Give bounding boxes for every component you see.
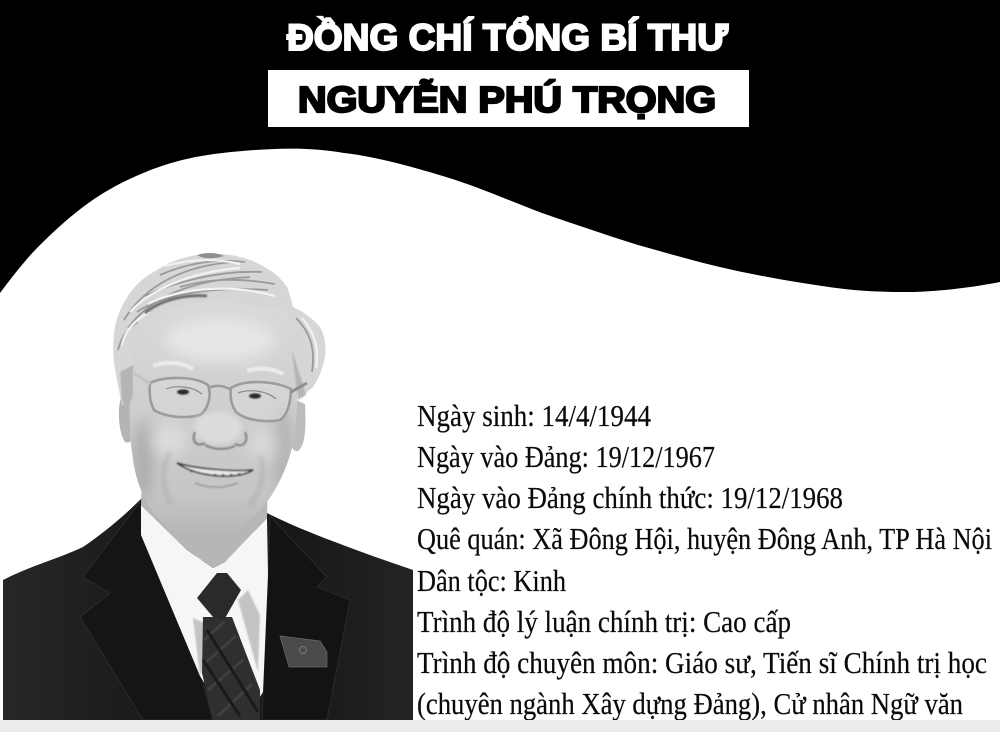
jacket bbox=[3, 497, 413, 720]
title: line 1: ĐỒNG CHÍ TỔNG BÍ THƯ bbox=[287, 15, 728, 58]
hair bbox=[113, 253, 325, 412]
eyelid lines bbox=[166, 387, 276, 399]
nose bbox=[194, 412, 246, 449]
eyebrows bbox=[153, 363, 283, 374]
hair sideburn shade bbox=[120, 350, 306, 412]
official party entry date: Ngày vào Đảng chính thức: 19/12/1968 bbox=[417, 480, 843, 515]
right ear bbox=[291, 400, 305, 451]
name text: NGUYỄN PHÚ TRỌNG bbox=[298, 78, 716, 120]
lapel pin bbox=[280, 636, 327, 667]
face bbox=[130, 301, 297, 541]
title: name plate bbox=[268, 70, 749, 127]
left ear bbox=[119, 395, 136, 442]
black wave header bbox=[0, 0, 1000, 293]
collar shadow bbox=[193, 590, 260, 676]
bottom grey band bbox=[0, 720, 1000, 732]
left lapel bbox=[80, 498, 213, 720]
eyeglasses bbox=[134, 373, 307, 421]
shirt and collar bbox=[141, 505, 268, 700]
ethnicity: Dân tộc: Kinh bbox=[417, 563, 566, 598]
right lapel bbox=[262, 516, 350, 720]
face shading bbox=[133, 318, 293, 505]
neck bbox=[141, 470, 268, 568]
biography text block bbox=[417, 398, 992, 721]
necktie bbox=[197, 573, 260, 720]
left eye bbox=[177, 389, 189, 395]
party entry date: Ngày vào Đảng: 19/12/1967 bbox=[417, 439, 715, 474]
name plate background bbox=[268, 70, 749, 127]
birth date: Ngày sinh: 14/4/1944 bbox=[417, 398, 651, 433]
mouth bbox=[177, 463, 253, 487]
right eye bbox=[249, 393, 261, 399]
political theory level: Trình độ lý luận chính trị: Cao cấp bbox=[417, 604, 791, 639]
portrait: black and white illustration bbox=[3, 253, 413, 720]
